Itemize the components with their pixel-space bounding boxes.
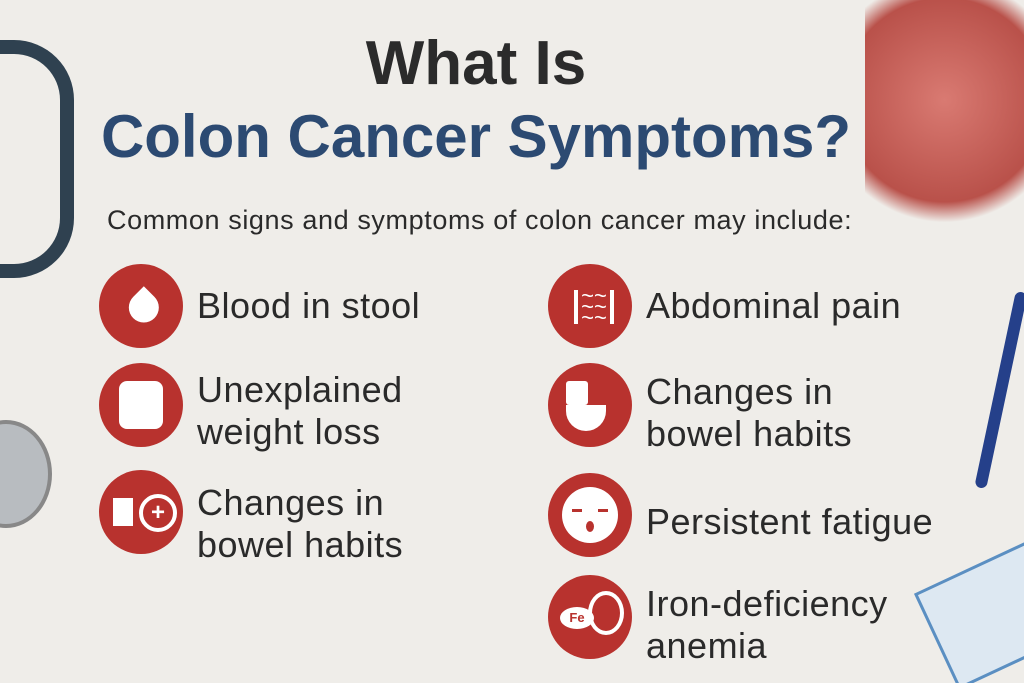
icon: medicine: + (151, 499, 165, 526)
icon: tired face (548, 473, 632, 557)
decoration: colon model (865, 0, 1024, 250)
subtitle: Common signs and symptoms of colon cancer may include: (107, 205, 852, 235)
title: Colon Cancer Symptoms? (101, 103, 851, 170)
title (101, 29, 851, 170)
item: abdominal pain (548, 264, 901, 348)
icon: toilet (548, 363, 632, 447)
icon: medicine (99, 470, 183, 554)
decoration: stethoscope chestpiece (0, 420, 52, 528)
icon: abdomen: ~~ (581, 294, 607, 319)
item: blood in stool: Blood in stool (197, 285, 420, 326)
item: weight loss: Unexplained (197, 369, 403, 410)
icon: blood drop (99, 264, 183, 348)
item: fatigue (548, 473, 933, 557)
icon: scale (99, 363, 183, 447)
item: fatigue: Persistent fatigue (646, 501, 933, 542)
item: weight loss (99, 363, 403, 452)
icon: iron (548, 575, 632, 659)
decoration: clipboard (914, 536, 1024, 683)
icon: iron: Fe (569, 610, 585, 625)
decoration: stethoscope (0, 40, 74, 278)
item: abdominal pain: Abdominal pain (646, 285, 901, 326)
item: bowel habits right (548, 363, 852, 454)
item: bowel habits left: Changes in (197, 482, 384, 523)
item: bowel habits left: bowel habits (197, 524, 403, 565)
icon: abdomen: ~~ (581, 283, 607, 308)
item: bowel habits right: bowel habits (646, 413, 852, 454)
decoration: pen (974, 291, 1024, 489)
item: anemia: Iron-deficiency (646, 583, 888, 624)
item: bowel habits left (99, 470, 403, 565)
icon: abdomen: ~~ (581, 305, 607, 330)
item: anemia: anemia (646, 625, 767, 666)
item: weight loss: weight loss (197, 411, 381, 452)
item: bowel habits right: Changes in (646, 371, 833, 412)
icon: abdomen (548, 264, 632, 348)
item: blood in stool (99, 264, 420, 348)
title: What Is (366, 29, 586, 98)
item: anemia (548, 575, 888, 666)
